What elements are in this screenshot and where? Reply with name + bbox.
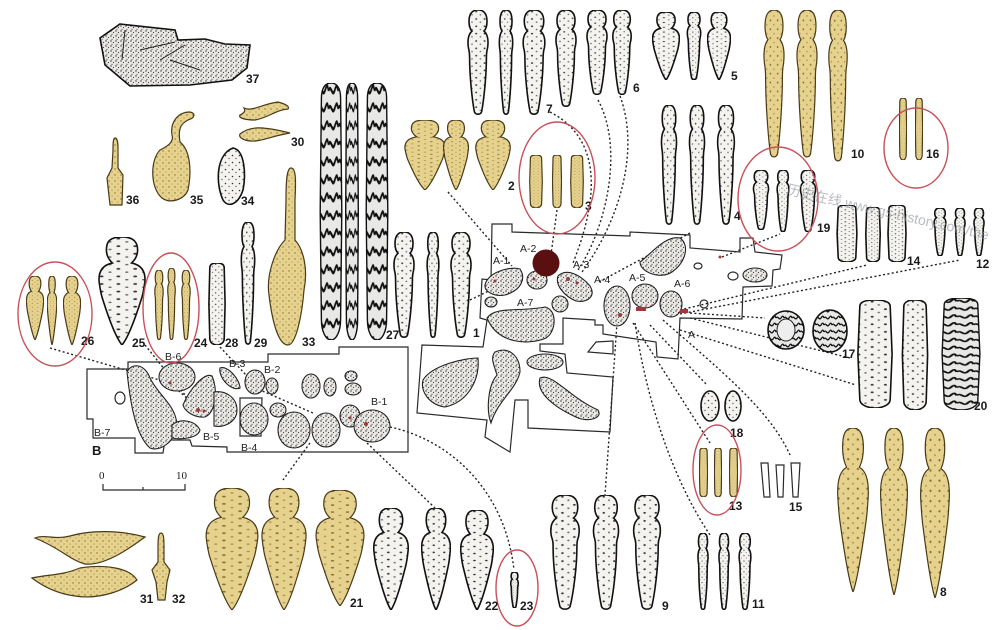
figure 23: circled small figurine: 23	[520, 599, 534, 613]
plan A labels: A-3	[573, 259, 590, 271]
find markers	[494, 256, 722, 317]
figure 35: bird-shaped: 35	[190, 193, 204, 207]
figure 30: two animals: 30	[291, 135, 305, 149]
figure 28	[209, 263, 239, 350]
plan A labels: A-1	[493, 255, 510, 267]
figure 9: 9	[662, 599, 669, 613]
figure 14	[837, 205, 921, 268]
figure 26: circled yellow figurines	[18, 262, 95, 366]
figure 5	[653, 12, 738, 83]
figure 22: 22	[485, 599, 499, 613]
plan B labels: B-4	[241, 442, 258, 454]
figure 18	[701, 391, 744, 440]
figure 13: circled figurines: 13	[729, 499, 743, 513]
figure 29	[241, 222, 268, 350]
figure 20	[858, 298, 988, 413]
figure 9	[551, 495, 669, 613]
plan A stippled pits	[422, 238, 767, 423]
find markers	[168, 382, 368, 426]
figure 1	[394, 232, 480, 340]
figure 10: yellow tall figurines	[764, 10, 865, 161]
figure 33: tall yellow figurine: 33	[302, 335, 316, 349]
figure 22	[374, 508, 499, 613]
plan A inner notch	[588, 341, 613, 354]
figure 27: long hatched rods: 27	[386, 328, 400, 342]
plan A outline	[417, 224, 782, 452]
plan A labels	[493, 243, 695, 341]
plan A labels: A-6	[674, 278, 690, 290]
figure 4	[661, 105, 741, 224]
figure 6: white figurines: 6	[633, 81, 640, 95]
figure 17	[768, 310, 856, 361]
figure 12: 12	[976, 257, 990, 271]
figure 11: 11	[752, 597, 765, 611]
figure 4: 4	[734, 209, 741, 223]
figure 30: two animals	[240, 102, 305, 149]
figure 5: 5	[731, 69, 738, 83]
figure 13: circled figurines	[693, 425, 743, 515]
figure 20: 20	[974, 399, 988, 413]
figure 29: 29	[254, 336, 268, 350]
figure 1: 1	[473, 326, 480, 340]
figure 21: yellow venus figurines: 21	[350, 596, 364, 610]
figure 21: yellow venus figurines	[206, 488, 364, 610]
figure 34: dotted oval: 34	[241, 194, 255, 208]
figure 37: engraved fragment	[100, 24, 260, 86]
figure 23: circled small figurine	[496, 550, 538, 626]
label 7: 7	[546, 102, 553, 116]
figure 31: yellow fish: 31	[140, 592, 154, 606]
plan B labels: B-1	[371, 396, 388, 408]
figure 36	[107, 138, 140, 207]
plan A labels: A-7	[517, 297, 534, 309]
figure 34: dotted oval	[218, 148, 255, 208]
plan B labels: B-5	[203, 431, 220, 443]
figure 3: circled yellow figurines: 3	[585, 199, 592, 213]
plan B outline	[87, 347, 408, 453]
figure 16: circled pair: 16	[926, 147, 940, 161]
figure 25: 25	[132, 336, 146, 350]
figure 17: 17	[842, 347, 856, 361]
figure 24: circled yellow figurines: 24	[194, 336, 208, 350]
plan A labels: A-5	[629, 272, 646, 284]
figure 12	[934, 208, 990, 271]
scale bar	[99, 470, 188, 490]
scale bar: 0	[99, 470, 105, 482]
watermark: 历史在线 www.gs-history.com/the	[785, 181, 991, 243]
figure 6: white figurines	[468, 10, 640, 114]
figure 8: yellow tall figurines: 8	[940, 585, 947, 599]
figure 16: circled pair	[884, 98, 948, 188]
site plan A	[417, 224, 782, 452]
figure 36: 36	[126, 193, 140, 207]
figure 25	[99, 237, 146, 350]
figure 19: circled figurines	[738, 147, 831, 251]
figure 3: circled yellow figurines	[519, 122, 595, 234]
plan B stippled pits	[115, 363, 390, 449]
figure 31: yellow fish	[32, 532, 154, 606]
plan B labels: B-2	[264, 364, 280, 376]
figure 8: yellow tall figurines	[838, 428, 949, 599]
figure 15: 15	[789, 500, 803, 514]
site plan B	[87, 347, 408, 458]
figure 35: bird-shaped	[153, 112, 204, 207]
figure 15	[761, 463, 803, 514]
plan B labels: B-7	[94, 427, 110, 439]
figure 24: circled yellow figurines	[143, 253, 208, 363]
plan A labels: A-2	[520, 243, 536, 255]
plan B labels: B	[92, 443, 101, 458]
figure 32	[152, 533, 186, 606]
plan A labels: A-4	[594, 274, 610, 286]
figure 37: engraved fragment: 37	[246, 72, 260, 86]
plan B labels: B-3	[229, 358, 246, 370]
scale bar: 10	[176, 470, 188, 482]
figure 28: 28	[225, 336, 239, 350]
figure 2: yellow figurines	[405, 120, 515, 193]
figure 18: 18	[730, 426, 744, 440]
plan B labels: B-6	[165, 351, 182, 363]
figure 2: yellow figurines: 2	[508, 179, 515, 193]
figure 32: 32	[172, 592, 186, 606]
figure 26: circled yellow figurines: 26	[81, 334, 95, 348]
figure 27: long hatched rods	[320, 83, 400, 342]
plan B labels	[92, 351, 388, 458]
plan A labels: A	[688, 329, 695, 341]
figure 33: tall yellow figurine	[268, 168, 316, 349]
figure 14: 14	[907, 254, 921, 268]
dotted lines linking plans to figures	[50, 96, 960, 570]
figure 11	[698, 533, 765, 611]
figure 19: circled figurines: 19	[817, 221, 831, 235]
red dot marker	[532, 250, 560, 276]
figure 10: yellow tall figurines: 10	[851, 147, 865, 161]
